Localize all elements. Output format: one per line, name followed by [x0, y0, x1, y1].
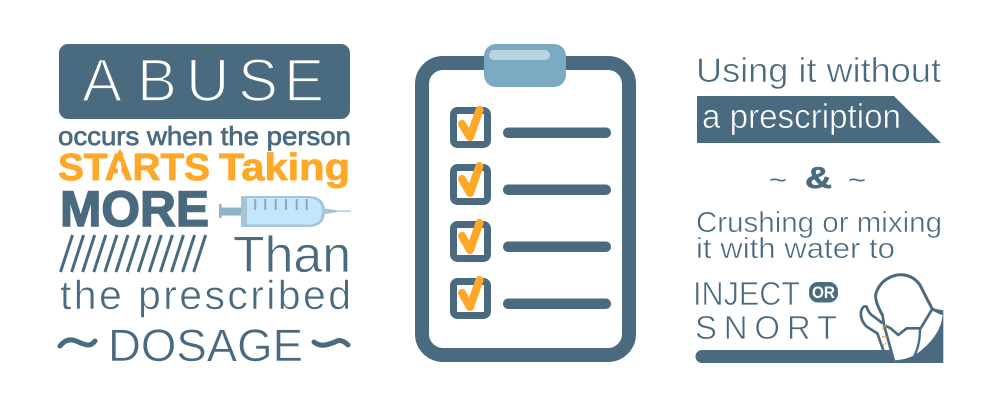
text: MORE: MORE [60, 181, 209, 237]
text: occurs when the person: occurs when the person [58, 121, 351, 151]
decorative slashes [60, 235, 206, 272]
text: STARTS Taking [58, 147, 350, 189]
ampersand divider: ~ [769, 167, 787, 194]
ampersand divider: & [805, 160, 832, 195]
ampersand divider: ~ [848, 167, 866, 194]
clipboard clip [484, 44, 566, 87]
right tilde [314, 340, 348, 345]
text: it with water to: it with water to [696, 233, 895, 265]
panel: forms of abuse [693, 52, 943, 363]
text: STARTS Taking: STARTS [58, 147, 210, 189]
checklist item 3 [454, 223, 611, 258]
text: SNORT: SNORT [695, 309, 837, 346]
banner: a prescription: a prescription [702, 98, 901, 136]
left tilde [60, 340, 95, 346]
text: STARTS Taking: Taking [219, 147, 350, 189]
badge: OR: OR [812, 284, 835, 302]
text: Than: Than [233, 226, 351, 283]
checklist item 4 [454, 280, 611, 316]
panel: clipboard [422, 44, 629, 355]
checklist item 1 [454, 110, 611, 144]
text: Crushing or mixing: Crushing or mixing [696, 207, 942, 239]
icon: syringe [219, 196, 351, 227]
text: the prescribed: the prescribed [60, 272, 351, 318]
panel: abuse definition [58, 44, 351, 371]
text: INJECT: INJECT [693, 275, 800, 312]
base bar [696, 350, 943, 363]
icon: person snorting [861, 275, 943, 363]
banner: a prescription [697, 96, 941, 143]
text: DOSAGE: DOSAGE [108, 320, 303, 371]
checklist item 2 [454, 166, 611, 202]
ampersand divider [769, 160, 866, 195]
heading: ABUSE: ABUSE [82, 47, 324, 114]
clipboard board [422, 63, 629, 355]
text: Using it without: Using it without [696, 52, 942, 90]
